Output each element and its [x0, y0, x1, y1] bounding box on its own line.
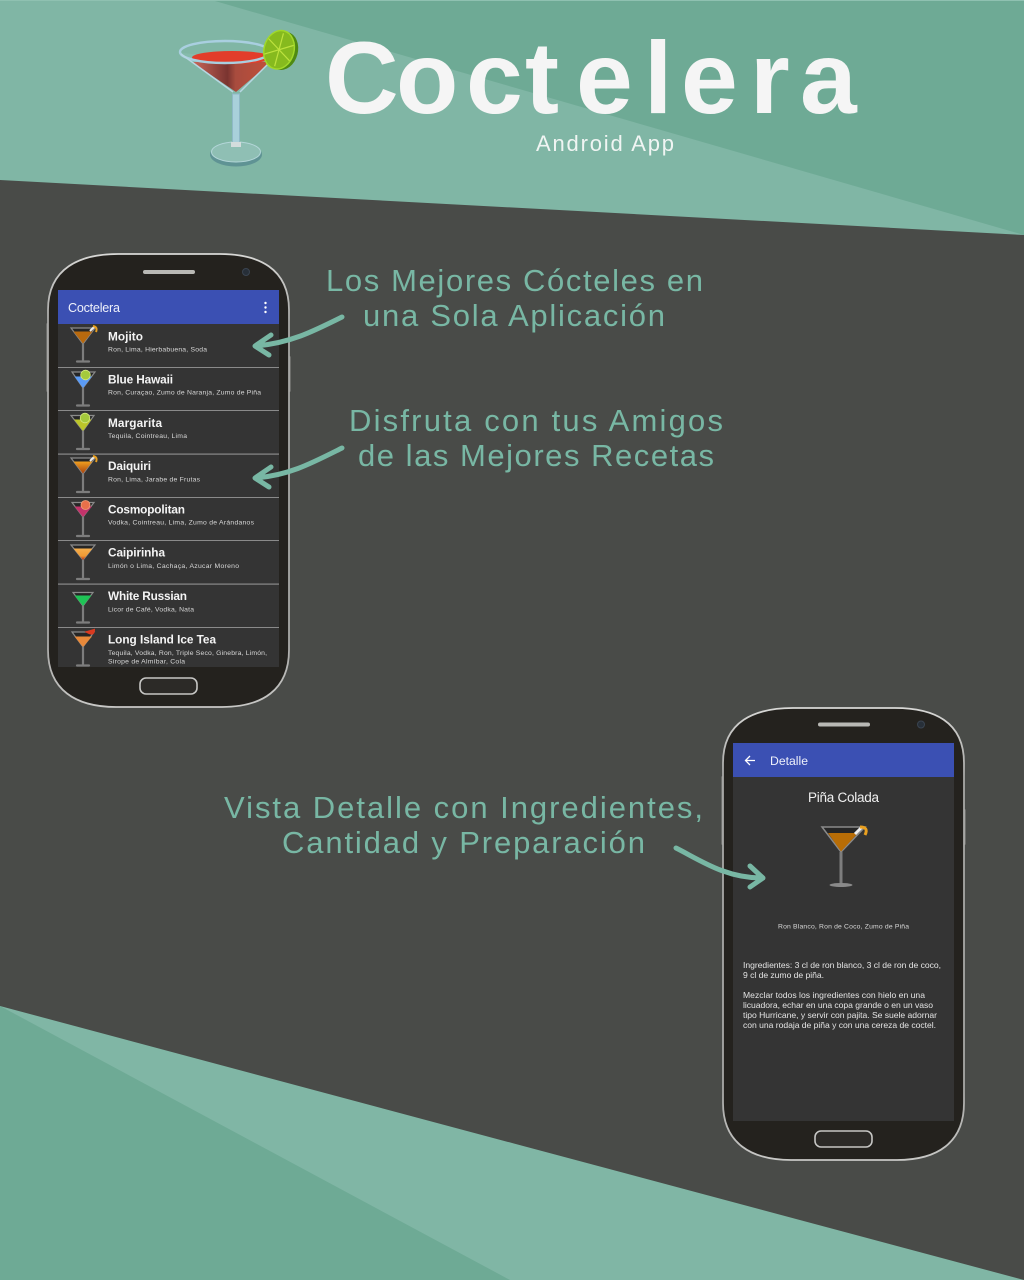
ingredients summary: Ron Blanco, Ron de Coco, Zumo de Piña: [778, 924, 909, 930]
row: Blue Hawaii: [72, 370, 261, 406]
recipe text: 9 cl de zumo de piña.: [743, 970, 824, 980]
row: Long Island Ice Tea: Sirope de Almíbar, Cola: [108, 658, 185, 666]
row: Cosmopolitan: [72, 500, 255, 536]
title: Coctelera: [325, 21, 858, 135]
row: Blue Hawaii: Ron, Curaçao, Zumo de Naranja, Zumo de Piña: [108, 390, 261, 396]
arrow: to list item: [255, 448, 342, 487]
callout: enjoy with friends: Disfruta con tus Amigos: [349, 403, 723, 438]
row: Margarita: [71, 413, 187, 449]
callout: detail view: Vista Detalle con Ingredientes,: [224, 790, 703, 825]
row: Margarita: Tequila, Cointreau, Lima: [108, 433, 187, 440]
recipe text: con una rodaja de piña y con una cereza de coctel.: [743, 1020, 936, 1030]
phone body: [722, 708, 966, 1160]
recipe text: licuadora, echar en una copa grande o en un vaso: [743, 1000, 933, 1010]
callout: best cocktails: Los Mejores Cócteles en: [326, 263, 703, 298]
row: Cosmopolitan: Vodka, Cointreau, Lima, Zumo de Arándanos: [108, 520, 255, 526]
row separators: [58, 367, 279, 628]
callout: best cocktails: [326, 263, 703, 333]
callout: detail view: Cantidad y Preparación: [282, 825, 645, 860]
row: Daiquiri: [71, 456, 201, 492]
callout: detail view: [224, 790, 703, 860]
row: Caipirinha: [71, 545, 239, 579]
arrow: to list item: [255, 317, 342, 355]
row: Long Island Ice Tea: Tequila, Vodka, Ron, Triple Seco, Ginebra, Limón,: [108, 650, 267, 657]
row: White Russian: [73, 589, 194, 622]
icon: drink glass: [822, 827, 866, 887]
icon: cocktail logo: [180, 27, 302, 166]
row: Caipirinha: Caipirinha: [108, 546, 165, 560]
arrow: to detail screen: [676, 848, 763, 887]
subtitle: Android App: [536, 131, 674, 156]
row: Daiquiri: Ron, Lima, Jarabe de Frutas: [108, 476, 201, 484]
row: Long Island Ice Tea: [72, 630, 267, 666]
phone: detail screen: [722, 708, 966, 1160]
callout: best cocktails: una Sola Aplicación: [363, 298, 665, 333]
row: Blue Hawaii: Blue Hawaii: [108, 372, 173, 386]
row: White Russian: Licor de Café, Vodka, Nata: [108, 606, 194, 614]
screen: [58, 290, 279, 667]
callout: enjoy with friends: de las Mejores Recetas: [358, 438, 714, 473]
phone body: [46, 254, 290, 707]
row: Mojito: Ron, Lima, Hierbabuena, Soda: [108, 346, 207, 354]
row: Mojito: Mojito: [108, 330, 143, 344]
header band: [0, 0, 1024, 235]
recipe text: Ingredientes: 3 cl de ron blanco, 3 cl de ron de coco,: [743, 960, 941, 970]
app bar: Coctelera: [68, 301, 120, 315]
row: Caipirinha: Limón o Lima, Cachaça, Azucar Moreno: [108, 563, 239, 570]
phone: list screen: [46, 254, 290, 707]
row: White Russian: White Russian: [108, 589, 187, 603]
footer band: [0, 1006, 1024, 1280]
screen: [733, 743, 954, 1121]
drink name: Piña Colada: [808, 790, 879, 805]
app bar: [58, 290, 279, 324]
icon: lime slice: [259, 27, 302, 73]
row: Margarita: Margarita: [108, 416, 162, 430]
row: Daiquiri: Daiquiri: [108, 459, 151, 473]
row: Mojito: [71, 326, 207, 362]
app bar: Detalle: [770, 754, 808, 768]
row: Long Island Ice Tea: Long Island Ice Tea: [108, 632, 216, 646]
app bar: [733, 743, 954, 777]
recipe text: Mezclar todos los ingredientes con hielo en una: [743, 990, 925, 1000]
callout: enjoy with friends: [349, 403, 723, 473]
recipe text: tipo Hurricane, y servir con pajita. Se suele adornar: [743, 1010, 937, 1020]
recipe text: [743, 960, 941, 1030]
row: Cosmopolitan: Cosmopolitan: [108, 502, 185, 516]
